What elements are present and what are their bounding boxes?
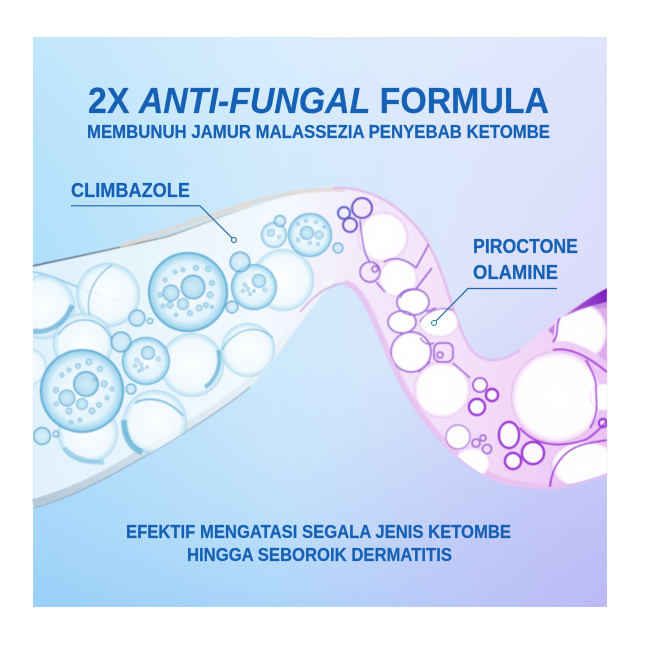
purple wedge	[548, 288, 607, 338]
ribbon body	[33, 188, 607, 508]
olamine label: OLAMINE	[473, 262, 558, 284]
purple membranes	[338, 198, 492, 454]
climbazole label: CLIMBAZOLE	[71, 180, 190, 202]
white chambers	[358, 212, 619, 489]
title: 2X ANTI-FUNGAL FORMULA	[88, 80, 549, 121]
vivid purple bubbles	[469, 378, 607, 469]
callout: climbazole	[71, 180, 236, 242]
callout: piroctone olamine	[432, 236, 578, 326]
piroctone marker	[432, 320, 436, 326]
footer line one: EFEKTIF MENGATASI SEGALA JENIS KETOMBE	[126, 522, 511, 542]
background panel	[33, 37, 607, 607]
ribbon edges	[33, 188, 607, 508]
climbazole leader line	[71, 206, 232, 238]
subtitle: MEMBUNUH JAMUR MALASSEZIA PENYEBAB KETOMBE	[87, 122, 550, 142]
infographic canvas	[32, 37, 608, 607]
large cell lower	[40, 349, 124, 433]
medium cells	[122, 213, 332, 385]
piroctone label: PIROCTONE	[473, 236, 578, 258]
piroctone leader line	[436, 288, 557, 322]
chamber outlines	[520, 318, 607, 487]
pale background bubbles	[9, 249, 314, 463]
bubble shadows	[33, 265, 273, 462]
climbazole bubbles	[9, 213, 343, 463]
climbazole marker	[232, 238, 236, 242]
piroctone bubbles	[338, 198, 619, 489]
small bubbles	[34, 216, 343, 444]
footer line two: HINGGA SEBOROIK DERMATITIS	[187, 545, 452, 565]
large cell upper	[148, 252, 228, 332]
illustration: ingredient ribbon	[33, 188, 607, 508]
